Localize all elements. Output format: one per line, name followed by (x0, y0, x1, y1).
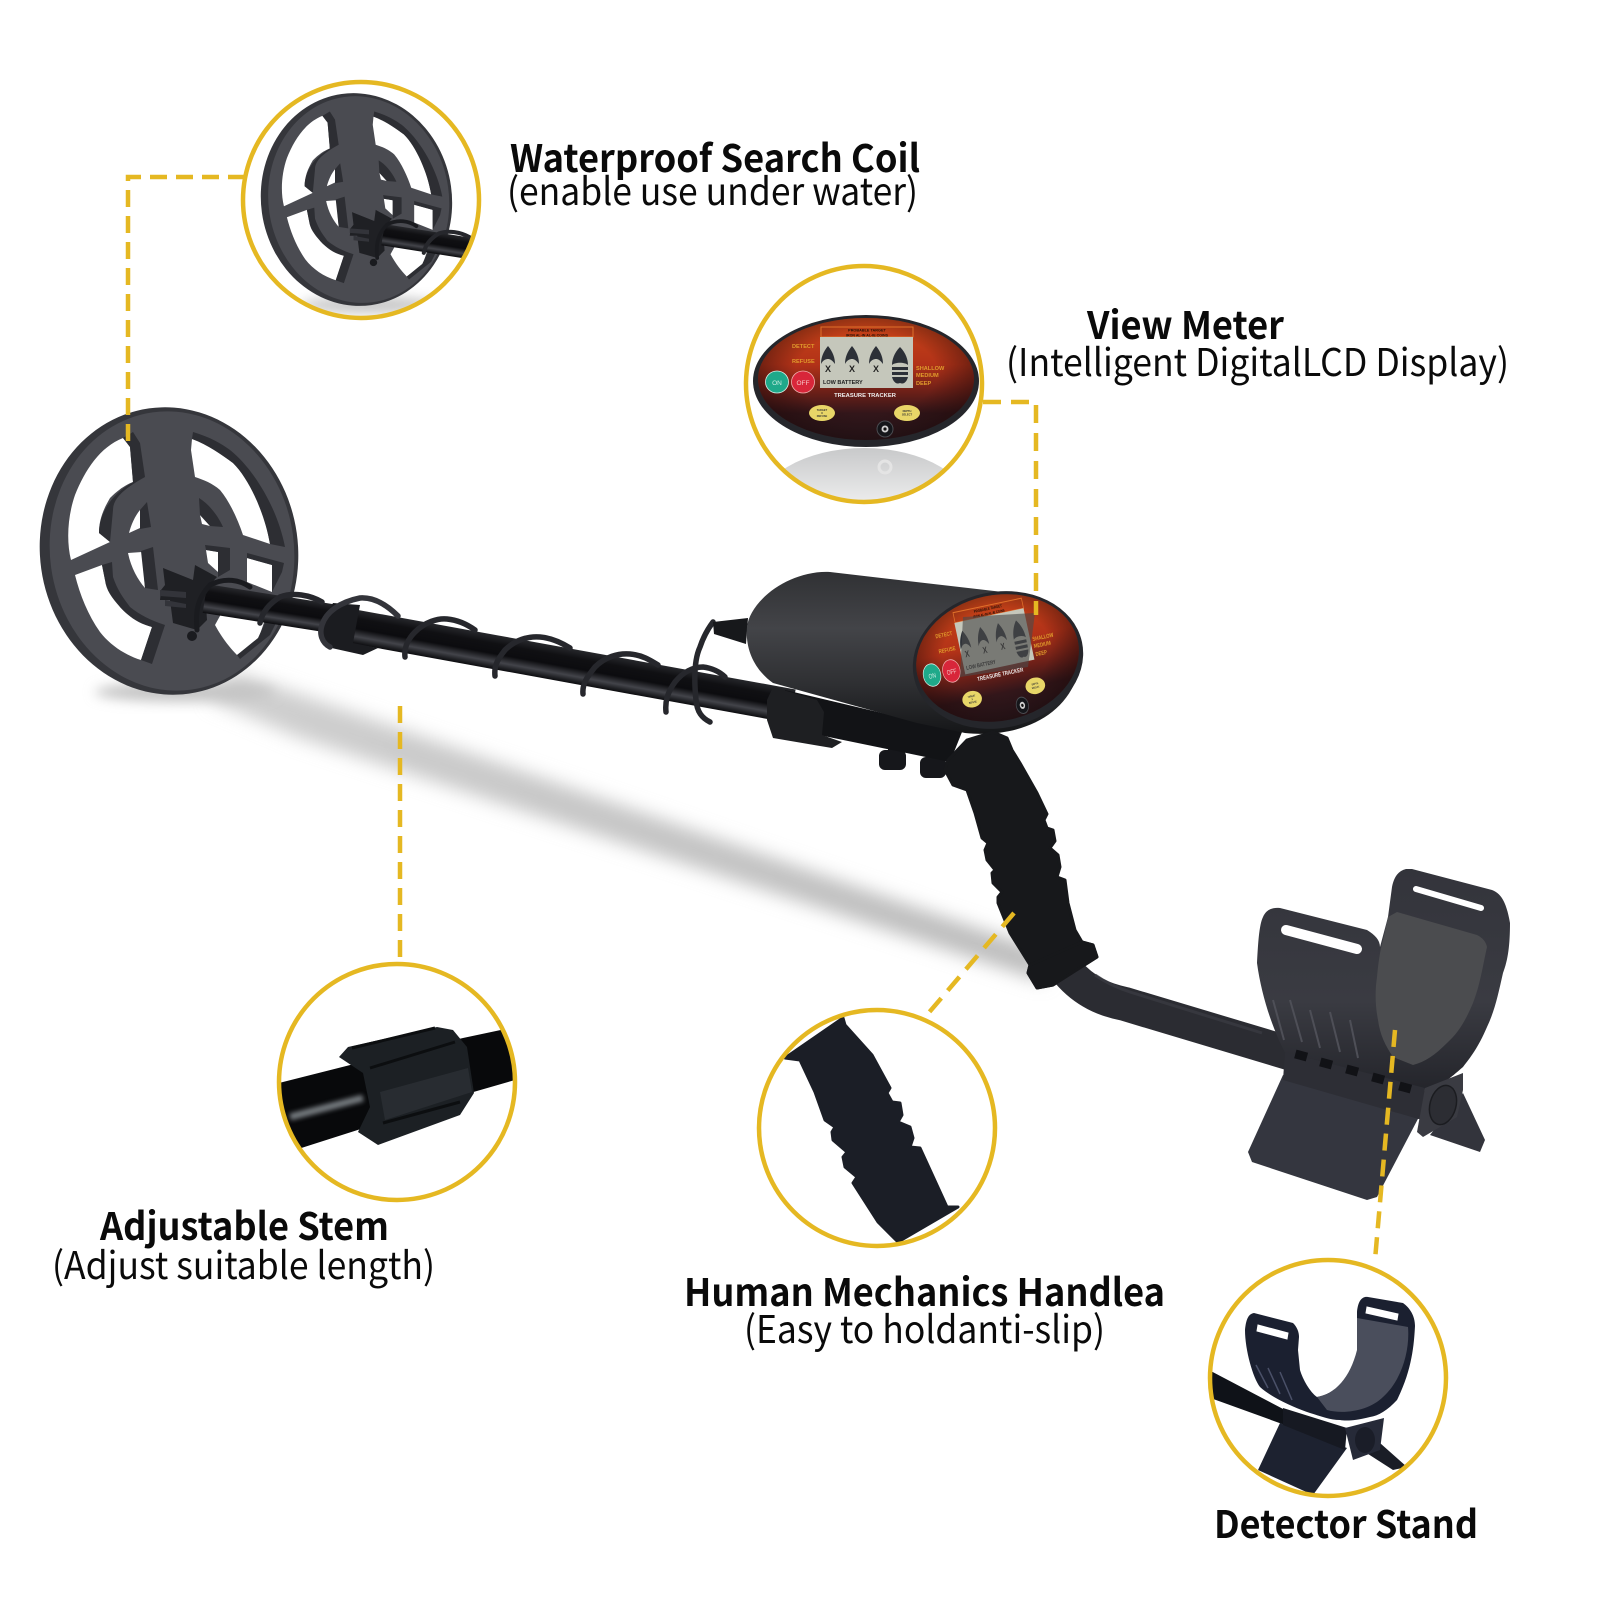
coiled cable around stem (405, 619, 725, 722)
cuff strap slots (1286, 930, 1357, 949)
dashed connector: adjustable stem (398, 706, 402, 966)
hinge (1345, 1418, 1384, 1460)
label: human mechanics handle (684, 1262, 1165, 1354)
dashed connector: handle (926, 913, 1014, 1016)
grip end cap (1028, 942, 1097, 988)
callout circle: view meter (744, 264, 984, 504)
callout circle: detector stand (1205, 1260, 1446, 1496)
adjustment knobs (879, 738, 946, 778)
lock collar (339, 1027, 474, 1145)
meter connector (713, 618, 748, 644)
leather pad (1317, 1318, 1408, 1412)
stem lock collar 1 (320, 598, 398, 655)
callout circle: adjustable stem (275, 964, 515, 1200)
label: adjustable stem: (Adjust suitable length) (52, 1235, 435, 1290)
meter face (900, 576, 1096, 744)
telescoping stem tube (337, 607, 796, 723)
cuff inner pad (1376, 912, 1487, 1065)
callout circle: search coil (243, 81, 491, 318)
dashed connector: view meter (983, 402, 1036, 615)
stand base plate (1248, 1075, 1420, 1200)
stand rear leg (1368, 1444, 1404, 1470)
label: view meter: View Meter (1086, 295, 1284, 350)
main metal detector product (21, 390, 1510, 1200)
strap slots (1257, 1325, 1288, 1339)
ground shadow of detector (95, 672, 1045, 982)
label: human mechanics handle: (Easy to holdanti-slip) (744, 1299, 1105, 1354)
cuff ribs (1273, 1000, 1358, 1058)
meter box body (747, 572, 1078, 734)
main search coil and stem (21, 390, 350, 712)
stand tube (1212, 1372, 1283, 1424)
meter reflection (785, 448, 943, 500)
label: adjustable stem: Adjustable Stem (99, 1196, 389, 1251)
label: human mechanics handle: Human Mechanics Handlea (684, 1262, 1165, 1317)
arm cuff and stand (1248, 869, 1510, 1200)
label: view meter (1006, 295, 1509, 387)
label: waterproof search coil: (enable use under water) (507, 161, 918, 216)
dashed connector: stand (1375, 1030, 1395, 1260)
cuff shell (1257, 869, 1510, 1090)
stem tube (275, 1028, 515, 1150)
cuff (1245, 1297, 1415, 1421)
stand plate (1258, 1423, 1347, 1495)
back stand leg (1430, 1093, 1485, 1152)
callout circle: handle (759, 1010, 995, 1246)
crossbar (1283, 1408, 1347, 1450)
stand hinge (1417, 1073, 1463, 1137)
label: detector stand: Detector Stand (1214, 1494, 1478, 1549)
label: waterproof search coil (507, 128, 920, 216)
stem lock collar 2 (767, 687, 842, 748)
cuff ribs (1256, 1365, 1292, 1400)
upper handle tube (785, 690, 962, 762)
dashed connector: search coil (128, 177, 245, 445)
label: waterproof search coil: Waterproof Search Coil (510, 128, 920, 183)
label: view meter: (Intelligent DigitalLCD Display) (1006, 332, 1509, 387)
lower handle tube (1068, 972, 1295, 1055)
foam grip handle (945, 732, 1097, 988)
label: adjustable stem (52, 1196, 435, 1290)
stand crossbar (1283, 1052, 1425, 1120)
